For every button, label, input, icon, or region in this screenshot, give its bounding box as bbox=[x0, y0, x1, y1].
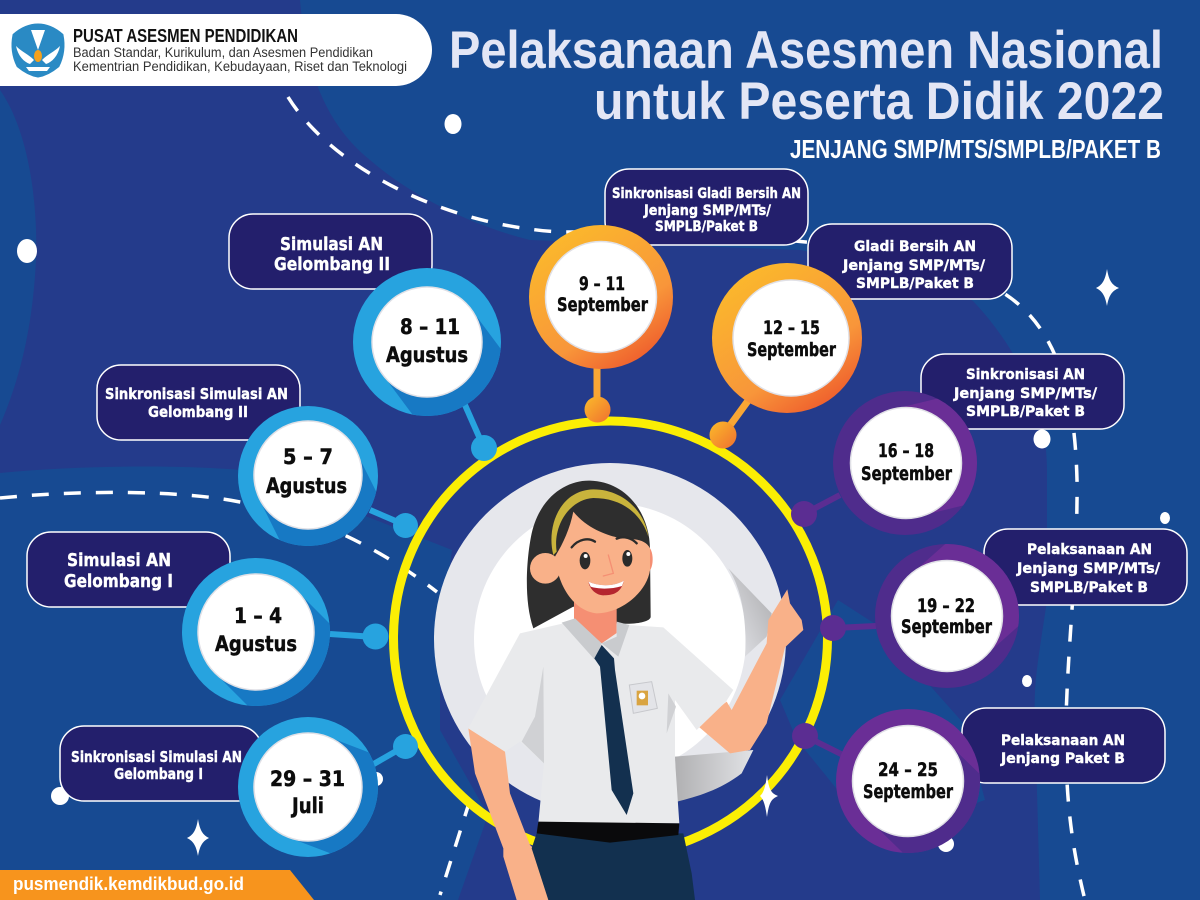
mouth bbox=[588, 581, 624, 595]
node: 8-11 Agustus bbox=[353, 268, 501, 461]
header title: PUSAT ASESMEN PENDIDIKAN bbox=[73, 26, 298, 46]
node: 24-25 September: September bbox=[863, 781, 953, 803]
box: Pelaksanaan AN Paket B bbox=[962, 708, 1165, 783]
shirt bbox=[468, 623, 733, 823]
node: 24-25 September: 24 – 25 bbox=[878, 759, 938, 781]
box: Gladi Bersih: SMPLB/Paket B bbox=[856, 276, 974, 292]
node: 16-18 September bbox=[791, 391, 977, 535]
left arm bbox=[468, 728, 555, 900]
box: Simulasi Gelombang I bbox=[27, 532, 230, 607]
box: Simulasi Gelombang I: Simulasi AN bbox=[67, 550, 171, 571]
node: 8-11 Agustus: Agustus bbox=[386, 343, 468, 367]
box: Sinkronisasi Simulasi Gelombang II: Gelombang II bbox=[148, 403, 248, 421]
node: 19-22 September: 19 – 22 bbox=[917, 595, 975, 617]
box: Sinkronisasi AN bbox=[921, 354, 1124, 429]
node: 29-31 Juli bbox=[238, 717, 418, 857]
box: Sinkronisasi Simulasi Gelombang II: Sinkronisasi Simulasi AN bbox=[105, 385, 288, 403]
node: 9-11 September bbox=[529, 225, 673, 422]
box: Pelaksanaan AN SMP: Pelaksanaan AN bbox=[1027, 542, 1152, 558]
illustration: student bbox=[468, 481, 803, 900]
box: Pelaksanaan AN SMP bbox=[984, 529, 1187, 605]
node: 1-4 Agustus: Agustus bbox=[215, 632, 297, 656]
title bbox=[449, 21, 1164, 131]
node: 12-15 September bbox=[710, 263, 862, 448]
node: 1-4 Agustus: 1 – 4 bbox=[234, 604, 282, 628]
box: Sinkronisasi Simulasi Gelombang I: Sinkronisasi Simulasi AN bbox=[71, 748, 242, 766]
node: 5-7 Agustus bbox=[238, 406, 418, 560]
box: Simulasi Gelombang II: Simulasi AN bbox=[280, 234, 383, 255]
right ear bbox=[642, 547, 653, 572]
icon: logo bbox=[13, 25, 63, 76]
node: 5-7 Agustus: Agustus bbox=[266, 474, 347, 498]
box: Sinkronisasi Simulasi Gelombang I: Gelombang I bbox=[114, 765, 203, 783]
icon: sparkle right bbox=[1096, 269, 1119, 306]
box: Simulasi Gelombang II: Gelombang II bbox=[274, 254, 390, 275]
node: 9-11 September: 9 – 11 bbox=[579, 273, 625, 295]
header line 2: Badan Standar, Kurikulum, dan Asesmen Pendidikan bbox=[73, 45, 373, 60]
node: 29-31 Juli: Juli bbox=[290, 794, 324, 818]
node: 12-15 September: September bbox=[747, 339, 836, 361]
box: Pelaksanaan AN SMP: Jenjang SMP/MTs/ bbox=[1016, 561, 1161, 577]
box: Sinkronisasi Gladi Bersih bbox=[605, 169, 808, 245]
node: 24-25 September bbox=[792, 709, 980, 853]
box: Sinkronisasi Gladi Bersih: SMPLB/Paket B bbox=[655, 219, 758, 235]
box: Sinkronisasi AN: SMPLB/Paket B bbox=[966, 404, 1085, 420]
node: 19-22 September: September bbox=[901, 616, 992, 638]
node: 9-11 September: September bbox=[557, 294, 648, 316]
box: Gladi Bersih: Jenjang SMP/MTs/ bbox=[842, 258, 986, 274]
box: Simulasi Gelombang II bbox=[229, 214, 432, 289]
node: 19-22 September bbox=[820, 544, 1019, 688]
tie bbox=[594, 645, 633, 815]
footer bar bbox=[0, 870, 314, 900]
ear bbox=[530, 553, 561, 584]
eyes bbox=[580, 550, 632, 569]
box: Pelaksanaan AN Paket B: Pelaksanaan AN bbox=[1001, 733, 1125, 749]
neck bbox=[574, 600, 617, 643]
node: 29-31 Juli: 29 – 31 bbox=[270, 767, 345, 791]
pocket badge bbox=[629, 682, 657, 713]
belt bbox=[537, 822, 679, 843]
box: Gladi Bersih: Gladi Bersih AN bbox=[854, 239, 976, 255]
decorative dots bbox=[17, 114, 1170, 852]
box: Sinkronisasi Gladi Bersih: Jenjang SMP/MTs/ bbox=[643, 203, 772, 219]
header line 3: Kementrian Pendidikan, Kebudayaan, Riset dan Teknologi bbox=[73, 59, 407, 74]
box: Sinkronisasi AN: Jenjang SMP/MTs/ bbox=[953, 386, 1098, 402]
node: 1-4 Agustus bbox=[182, 558, 388, 706]
trousers bbox=[532, 833, 695, 900]
sleeve shadow bbox=[522, 667, 676, 763]
node: 16-18 September: September bbox=[861, 463, 952, 485]
brows and nose bbox=[572, 537, 637, 576]
disc shadow bbox=[675, 568, 772, 802]
header pill bbox=[0, 14, 432, 86]
icon: sparkle left bbox=[187, 819, 209, 856]
node: 16-18 September: 16 – 18 bbox=[878, 440, 934, 462]
box: Sinkronisasi AN: Sinkronisasi AN bbox=[966, 367, 1085, 383]
face bbox=[555, 512, 650, 613]
white disc bbox=[434, 463, 786, 815]
box: Sinkronisasi Gladi Bersih: Sinkronisasi Gladi Bersih AN bbox=[612, 186, 801, 202]
box: Pelaksanaan AN Paket B: Jenjang Paket B bbox=[1000, 751, 1125, 767]
yellow ring bbox=[394, 421, 828, 855]
box: Sinkronisasi Simulasi Gelombang I bbox=[60, 726, 262, 801]
node: 8-11 Agustus: 8 – 11 bbox=[400, 315, 460, 339]
right arm bbox=[697, 589, 803, 753]
box: Pelaksanaan AN SMP: SMPLB/Paket B bbox=[1030, 580, 1148, 596]
hair bbox=[527, 481, 651, 628]
footer bar: pusmendik.kemdikbud.go.id bbox=[13, 874, 244, 894]
node: 5-7 Agustus: 5 – 7 bbox=[283, 445, 333, 469]
box: Simulasi Gelombang I: Gelombang I bbox=[64, 571, 173, 592]
headband bbox=[551, 489, 648, 555]
box: Gladi Bersih bbox=[808, 224, 1012, 299]
box: Sinkronisasi Simulasi Gelombang II bbox=[97, 365, 300, 440]
icon: sparkle on ring bbox=[760, 775, 778, 817]
collar bbox=[562, 618, 629, 660]
node: 12-15 September: 12 – 15 bbox=[763, 317, 820, 339]
